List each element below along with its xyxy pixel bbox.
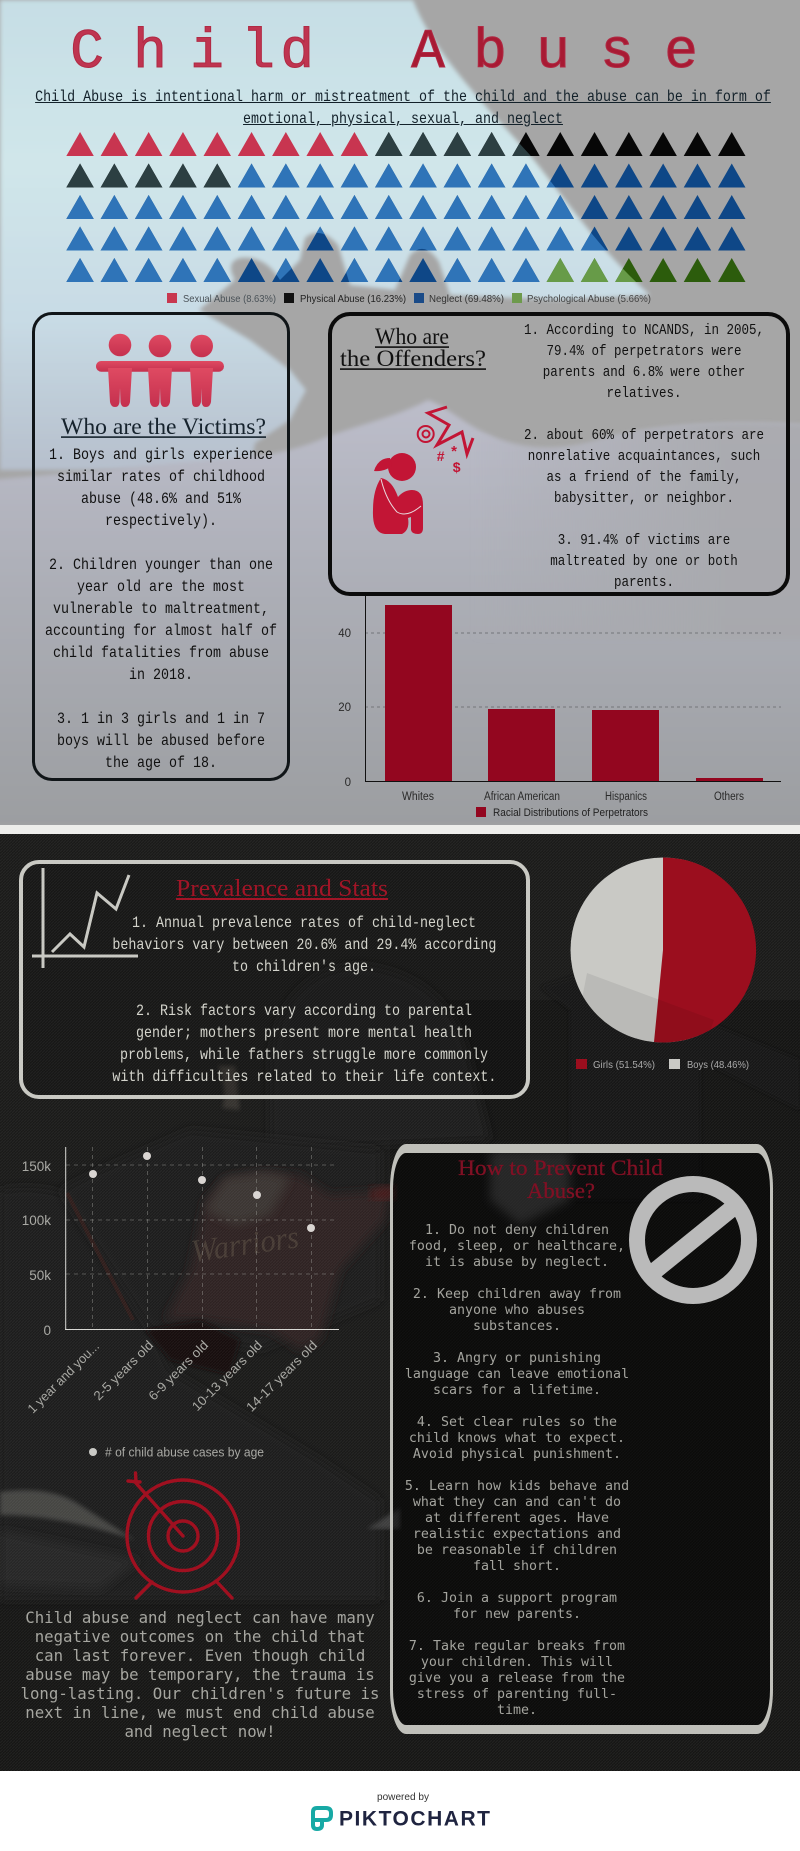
- heading: how to prevent child abuse: How to Prevent Child: [458, 1155, 663, 1180]
- intro text: emotional, physical, sexual, and neglect: [243, 110, 563, 128]
- title: [70, 20, 698, 75]
- text: prevention tips: 6. Join a support program: [417, 1591, 617, 1606]
- footer: powered by piktochart: powered by: [377, 1791, 430, 1803]
- text: victims facts: accounting for almost half of: [45, 622, 277, 640]
- scatter chart: child abuse cases by age: 1 year and you...: [24, 1339, 102, 1416]
- intro text: [35, 88, 771, 128]
- legend: pie chart: Girls (51.54%): [593, 1059, 655, 1071]
- text: offenders facts: as a friend of the family,: [547, 469, 741, 486]
- text: prevention tips: scars for a lifetime.: [433, 1383, 601, 1398]
- scatter chart: child abuse cases by age: 14-17 years old: [243, 1338, 320, 1415]
- text: conclusion: long-lasting. Our children's future is: [21, 1684, 379, 1702]
- text: offenders facts: 2. about 60% of perpetrators are: [524, 427, 764, 444]
- heading: how to prevent child abuse: Abuse?: [527, 1178, 595, 1203]
- text: prevention tips: 2. Keep children away from: [413, 1287, 621, 1302]
- legend: abuse types: Sexual Abuse (8.63%): [183, 293, 276, 305]
- text: offenders facts: 79.4% of perpetrators were: [547, 343, 741, 360]
- bar chart: racial distributions of perpetrators: 0: [345, 777, 351, 789]
- text: prevalence facts: to children's age.: [232, 958, 376, 976]
- text: conclusion: can last forever. Even though child: [35, 1646, 365, 1664]
- text: prevention tips: realistic expectations and: [413, 1527, 621, 1542]
- legend: abuse types: Psychological Abuse (5.66%): [527, 293, 651, 305]
- bar chart: racial distributions of perpetrators: African American: [484, 791, 560, 803]
- heading: who are the offenders: Who are: [375, 324, 449, 349]
- text: conclusion: Child abuse and neglect can have many: [25, 1608, 375, 1626]
- text: victims facts: abuse (48.6% and 51%: [81, 490, 241, 508]
- panel: who are the victims: [32, 312, 290, 781]
- text: prevalence facts: gender; mothers present more mental health: [136, 1024, 472, 1042]
- text: prevention tips: 5. Learn how kids behave and: [405, 1479, 629, 1494]
- text: prevention tips: stress of parenting full-: [417, 1687, 617, 1702]
- text: prevention tips: Avoid physical punishment.: [413, 1447, 621, 1462]
- text: victims facts: 3. 1 in 3 girls and 1 in 7: [57, 710, 265, 728]
- icon: three children: [96, 334, 224, 407]
- panel: prevalence and stats: [19, 860, 530, 1099]
- text: prevention tips: what they can and can't do: [413, 1495, 621, 1510]
- bar chart: racial distributions of perpetrators: Whites: [402, 791, 434, 803]
- icon: line graph: [32, 868, 138, 968]
- bar chart: racial distributions of perpetrators: Others: [714, 791, 744, 803]
- scatter chart: child abuse cases by age: 10-13 years old: [189, 1338, 265, 1414]
- bar chart: racial distributions of perpetrators: Hispanics: [605, 791, 647, 803]
- intro text: Child Abuse is intentional harm or mistreatment of the child and the abuse can be in form of: [35, 88, 771, 106]
- text: prevention tips: [405, 1223, 629, 1718]
- background: upper light photo: [0, 0, 800, 834]
- legend: abuse types: Neglect (69.48%): [429, 293, 504, 305]
- text: prevalence facts: [112, 914, 496, 1086]
- text: conclusion: [21, 1608, 379, 1740]
- text: victims facts: year old are the most: [77, 578, 245, 596]
- text: prevention tips: your children. This will: [421, 1655, 613, 1670]
- icon: distressed girl: *: [451, 443, 457, 460]
- text: offenders facts: nonrelative acquaintances, such: [528, 448, 760, 465]
- text: prevention tips: child knows what to expect.: [409, 1431, 625, 1446]
- text: victims facts: similar rates of childhood: [57, 468, 265, 486]
- text: prevention tips: for new parents.: [453, 1607, 581, 1622]
- text: prevention tips: language can leave emotional: [405, 1367, 629, 1382]
- scatter chart: child abuse cases by age: 0: [43, 1323, 51, 1338]
- background: lower dark photo: [0, 834, 800, 1771]
- panel: how to prevent child abuse: [390, 1144, 773, 1734]
- legend: pie chart: [576, 1059, 749, 1071]
- scatter chart: child abuse cases by age: 50k: [29, 1268, 51, 1283]
- text: prevention tips: give you a release from the: [409, 1671, 625, 1686]
- scatter chart: child abuse cases by age: 2-5 years old: [90, 1338, 156, 1403]
- footer: powered by piktochart: [311, 1791, 490, 1831]
- scatter chart: child abuse cases by age: # of child abuse cases by age: [105, 1446, 264, 1460]
- text: offenders facts: parents.: [614, 574, 674, 591]
- text: prevention tips: time.: [497, 1703, 537, 1718]
- text: prevention tips: 7. Take regular breaks from: [409, 1639, 625, 1654]
- legend: abuse types: [167, 293, 651, 305]
- text: conclusion: abuse may be temporary, the trauma is: [25, 1664, 375, 1684]
- text: prevention tips: 1. Do not deny children: [425, 1223, 609, 1238]
- background: lower dark photo: Warriors: [189, 1218, 301, 1269]
- text: offenders facts: maltreated by one or both: [550, 553, 738, 570]
- bar chart: racial distributions of perpetrators: Racial Distributions of Perpetrators: [493, 807, 648, 819]
- text: prevention tips: anyone who abuses: [449, 1303, 585, 1318]
- scatter chart: child abuse cases by age: 100k: [22, 1213, 51, 1228]
- text: victims facts: 2. Children younger than one: [49, 556, 273, 574]
- text: prevalence facts: 2. Risk factors vary according to parental: [136, 1002, 472, 1020]
- text: prevalence facts: behaviors vary between 20.6% and 29.4% according: [112, 936, 496, 954]
- text: victims facts: in 2018.: [129, 666, 193, 684]
- text: prevalence facts: with difficulties related to their life context.: [112, 1068, 496, 1086]
- scatter chart: child abuse cases by age: 150k: [22, 1159, 51, 1174]
- scatter chart: child abuse cases by age: 6-9 years old: [145, 1338, 211, 1403]
- heading: who are the victims: Who are the Victims?: [61, 414, 266, 439]
- text: victims facts: 1. Boys and girls experience: [49, 446, 273, 464]
- scatter chart: child abuse cases by age: [22, 1147, 339, 1460]
- panel: who are the offenders: [328, 312, 790, 596]
- icon: distressed girl: [372, 406, 474, 534]
- footer: powered by piktochart: PIKTOCHART: [339, 1808, 490, 1830]
- text: conclusion: and neglect now!: [124, 1722, 276, 1740]
- text: prevention tips: at different ages. Have: [425, 1511, 609, 1526]
- text: conclusion: negative outcomes on the child that: [35, 1626, 365, 1646]
- text: victims facts: boys will be abused before: [57, 732, 265, 750]
- text: victims facts: vulnerable to maltreatment,: [53, 600, 269, 618]
- text: prevention tips: 3. Angry or punishing: [433, 1351, 601, 1366]
- text: offenders facts: 3. 91.4% of victims are: [558, 532, 730, 549]
- heading: who are the offenders: the Offenders?: [340, 346, 486, 371]
- bar chart: racial distributions of perpetrators: 40: [338, 628, 351, 640]
- text: offenders facts: relatives.: [607, 385, 681, 402]
- text: offenders facts: [524, 322, 764, 591]
- text: victims facts: child fatalities from abuse: [53, 644, 269, 662]
- text: prevention tips: 4. Set clear rules so the: [417, 1415, 617, 1430]
- text: victims facts: the age of 18.: [105, 754, 217, 772]
- pie chart: girls and boys: [570, 858, 756, 1042]
- text: prevalence facts: 1. Annual prevalence rates of child-neglect: [132, 914, 476, 932]
- text: offenders facts: babysitter, or neighbor.: [554, 490, 734, 507]
- text: victims facts: respectively).: [105, 512, 217, 530]
- bar chart: racial distributions of perpetrators: [338, 596, 781, 819]
- text: offenders facts: 1. According to NCANDS, in 2005,: [524, 322, 764, 339]
- text: prevention tips: food, sleep, or healthcare,: [409, 1239, 625, 1254]
- text: conclusion: next in line, we must end child abuse: [25, 1702, 375, 1722]
- heading: how to prevent child abuse: [458, 1155, 663, 1203]
- bar chart: racial distributions of perpetrators: 20: [338, 702, 351, 714]
- heading: who are the offenders: [340, 324, 486, 371]
- icon: target with arrow: [125, 1471, 240, 1600]
- text: victims facts: [45, 446, 277, 772]
- icon: prohibition sign: [629, 1176, 757, 1304]
- text: prevention tips: be reasonable if children: [417, 1543, 617, 1558]
- text: prevention tips: it is abuse by neglect.: [425, 1255, 609, 1270]
- legend: abuse types: Physical Abuse (16.23%): [300, 293, 406, 305]
- icon: distressed girl: $: [453, 459, 461, 475]
- text: prevention tips: substances.: [473, 1319, 561, 1334]
- text: prevalence facts: problems, while fathers struggle more commonly: [120, 1046, 488, 1064]
- text: prevention tips: fall short.: [473, 1559, 561, 1574]
- pictogram: abuse types out of 100: [66, 132, 746, 282]
- text: offenders facts: parents and 6.8% were other: [543, 364, 745, 381]
- icon: distressed girl: #: [437, 448, 445, 464]
